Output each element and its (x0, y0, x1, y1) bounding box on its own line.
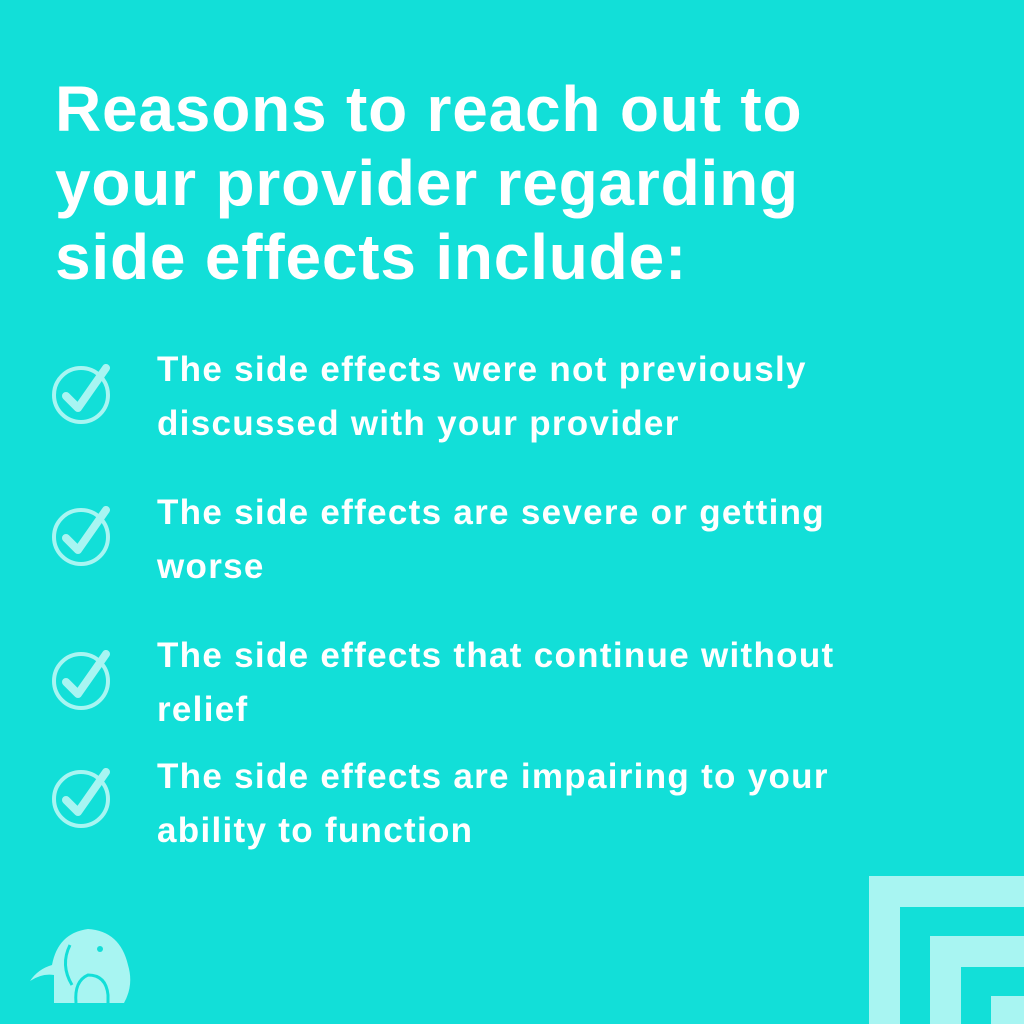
item 2: worse (157, 547, 265, 586)
item 1: discussed with your provider (157, 404, 680, 443)
decoration: nested corner squares (869, 876, 1024, 1024)
item 4: The side effects are impairing to your (157, 757, 829, 796)
item 1 (157, 350, 807, 443)
icon: check 4 (52, 768, 110, 828)
title: side effects include: (55, 221, 687, 293)
item 4 (157, 757, 829, 850)
item 2: The side effects are severe or getting (157, 493, 825, 532)
item 4: ability to function (157, 811, 473, 850)
title: your provider regarding (55, 147, 799, 219)
item 2 (156, 493, 825, 586)
item 3 (157, 636, 834, 729)
icon: check 2 (52, 506, 110, 566)
title: Reasons to reach out to (55, 73, 802, 145)
title (55, 73, 802, 293)
item 1: The side effects were not previously (157, 350, 807, 389)
icon: check 3 (52, 650, 110, 710)
item 3: The side effects that continue without (157, 636, 834, 675)
logo: elephant (30, 929, 130, 1003)
item 3: relief (157, 690, 248, 729)
icon: check 1 (52, 364, 110, 424)
